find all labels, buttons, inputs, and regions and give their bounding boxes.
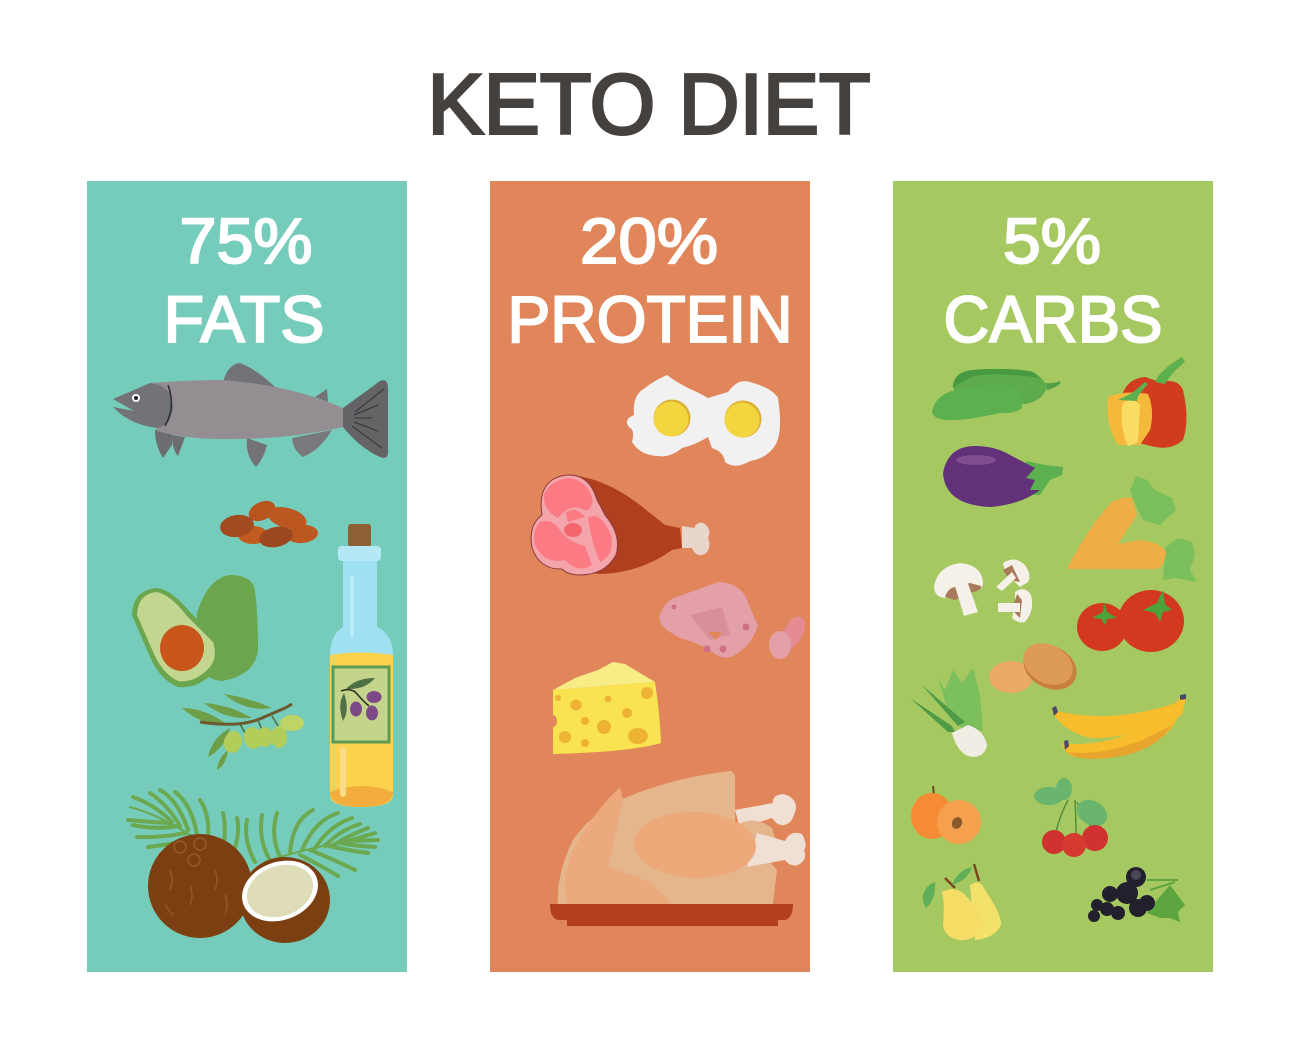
icon: olive oil bottle [330, 524, 393, 807]
icon: apricots [911, 786, 981, 844]
heading: 20% protein [508, 205, 792, 356]
icon: bell peppers [1107, 357, 1186, 448]
icon: coconut [148, 834, 330, 943]
icon: fish [113, 363, 388, 467]
icon: palm fronds [128, 790, 378, 876]
heading: 75% fats: FATS [164, 282, 324, 356]
icon: blackcurrants [1088, 867, 1185, 922]
icon: fried eggs [627, 375, 780, 466]
icon: spring onion [910, 668, 987, 757]
icon: roast chicken [550, 771, 806, 926]
panel: protein [490, 181, 810, 972]
icon: potatoes [989, 635, 1085, 699]
title: KETO DIET [428, 58, 870, 152]
icon: bananas [1052, 694, 1186, 759]
icon: carrots [1068, 476, 1197, 582]
panel: fats [87, 181, 407, 972]
heading: 20% protein: 20% [580, 205, 718, 277]
icon: eggplant [943, 446, 1063, 507]
icon: olive branch [182, 694, 304, 770]
icon: raw chicken [660, 582, 805, 659]
icon: cherries [1034, 778, 1112, 857]
icon: mushrooms [934, 559, 1032, 622]
icon: pears [923, 864, 1001, 940]
heading: 20% protein: PROTEIN [508, 282, 792, 356]
icon: almonds [219, 497, 319, 550]
panel: carbs [893, 181, 1213, 972]
icon: cucumbers [932, 369, 1060, 420]
heading: 75% fats [164, 205, 324, 356]
icon: avocado [132, 575, 258, 687]
heading: 5% carbs: 5% [1003, 205, 1101, 277]
icon: cheese [553, 662, 661, 754]
heading: 5% carbs [944, 205, 1162, 356]
heading: 75% fats: 75% [180, 205, 312, 277]
heading: 5% carbs: CARBS [944, 282, 1162, 356]
icon: tomatoes [1077, 590, 1184, 652]
icon: ham [531, 475, 709, 575]
